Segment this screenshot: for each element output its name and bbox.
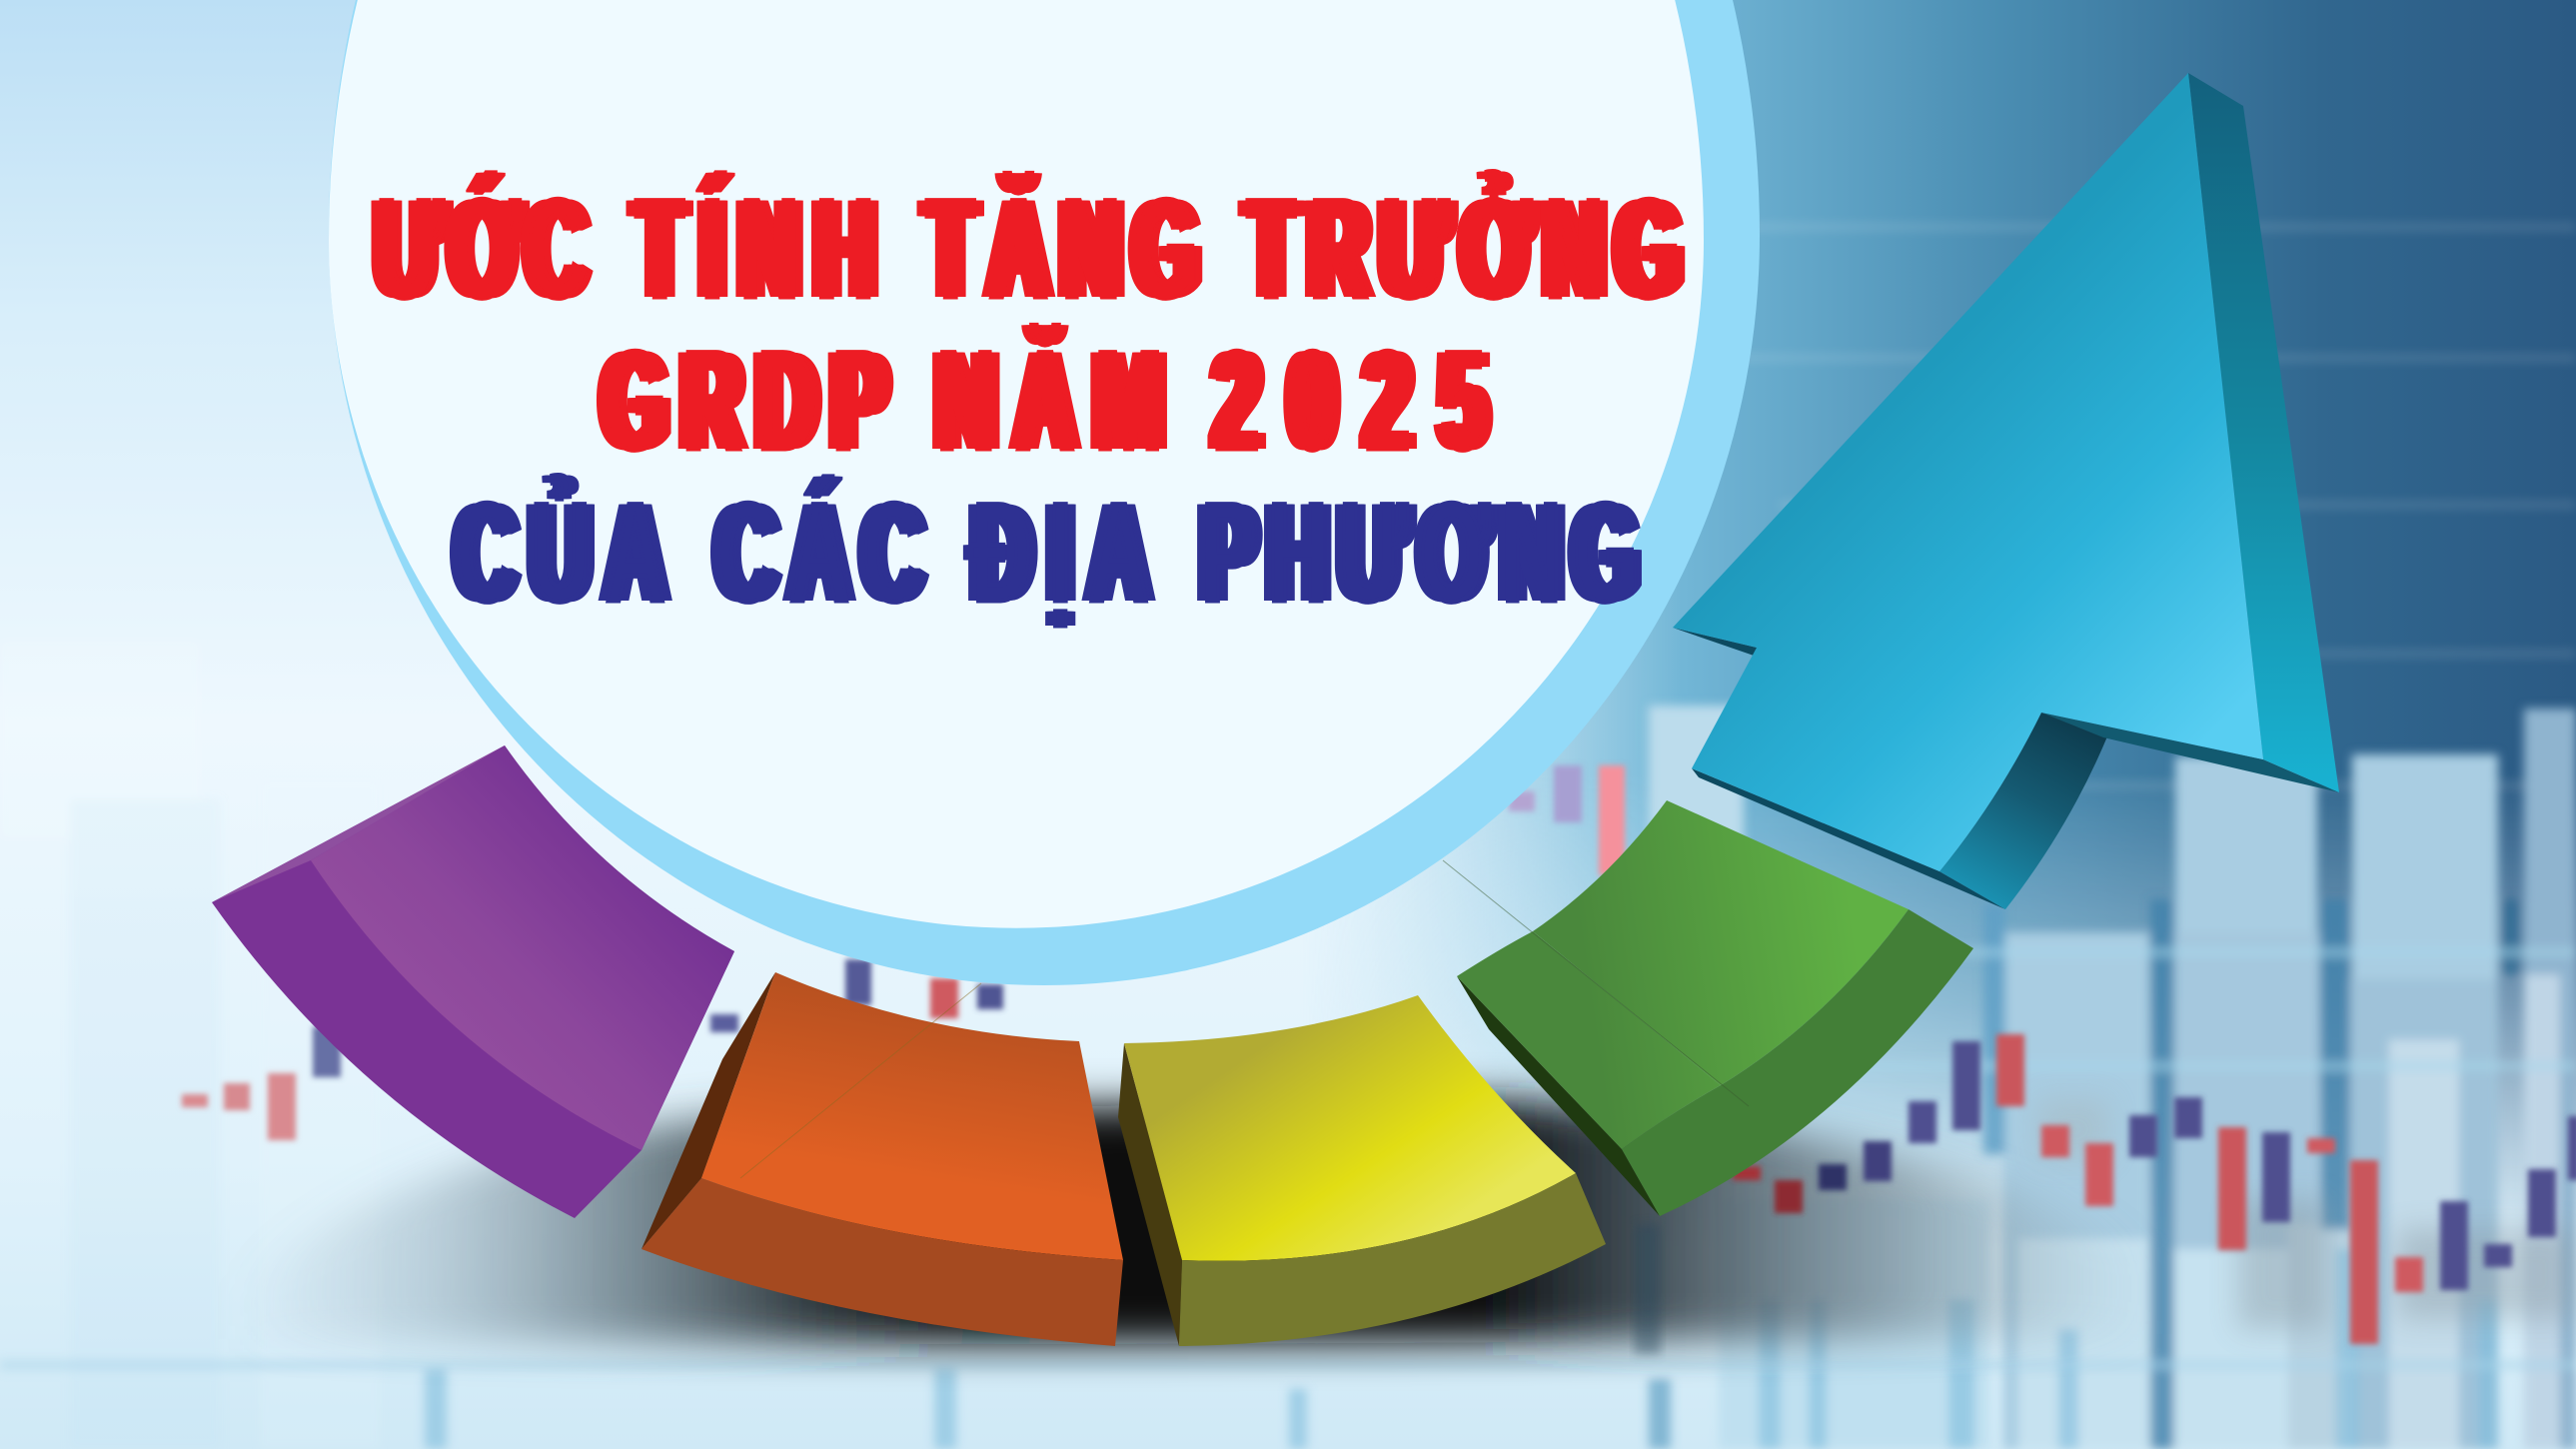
segment: purple	[212, 745, 734, 1218]
title line 1	[372, 169, 1693, 327]
title line 1: TĂNG	[925, 170, 1211, 327]
title line 3: PHƯƠNG	[1201, 474, 1649, 631]
title line 1: TÍNH	[635, 170, 890, 327]
candlesticks	[182, 765, 2576, 1344]
title line 3: CỦA	[456, 474, 680, 631]
panel: title circle with blue crescent	[329, 0, 1760, 985]
title line 2: NĂM	[936, 322, 1183, 479]
segment: orange	[642, 972, 1123, 1346]
title line 3: CÁC	[716, 474, 936, 631]
ground shadow under the segments	[240, 1099, 2148, 1354]
title	[372, 169, 1693, 631]
segment: yellow	[1118, 995, 1606, 1346]
title line 2	[596, 322, 1516, 479]
segment: green	[1443, 800, 1973, 1216]
title line 1: TRƯỞNG	[1246, 170, 1693, 327]
title line 3: ĐỊA	[972, 474, 1166, 631]
title line 3	[450, 473, 1649, 631]
arrow: rising blue 3D arrow	[1673, 73, 2339, 909]
title line 2: GRDP	[603, 322, 902, 479]
title line 1: ƯỚC	[376, 170, 592, 327]
title line 2: 2025	[1214, 322, 1516, 479]
